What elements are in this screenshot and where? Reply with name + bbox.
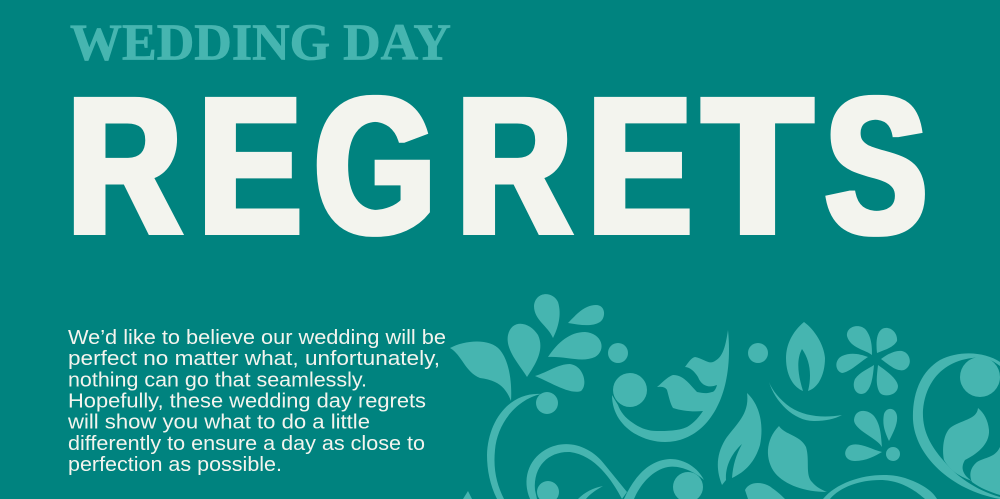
main title: regrets: E [199, 58, 301, 274]
six-petal flower [836, 326, 910, 395]
main title: regrets: G [315, 58, 435, 274]
middle leaves [718, 322, 937, 499]
intro paragraph: nothing can go that seamlessly. [68, 370, 367, 392]
right swirl [913, 353, 1000, 499]
main title: regrets: R [457, 58, 571, 274]
main title: regrets [68, 58, 926, 274]
main title: regrets: E [588, 58, 691, 274]
small flower [845, 409, 900, 461]
left sprig of leaves [450, 294, 604, 499]
intro paragraph: Hopefully, these wedding day regrets [68, 390, 426, 412]
main title: regrets: R [68, 58, 181, 274]
main title: regrets: S [826, 58, 926, 274]
intro paragraph [67, 327, 446, 476]
floral decoration [450, 294, 1000, 499]
intro paragraph: will show you what to do a little [67, 412, 370, 434]
lower curling vines [526, 444, 704, 499]
bird-like swirl [608, 330, 729, 442]
intro paragraph: perfection as possible. [68, 454, 282, 476]
intro paragraph: differently to ensure a day as close to [68, 433, 425, 455]
intro paragraph: We’d like to believe our wedding will be [68, 327, 446, 349]
intro paragraph: perfect no matter what, unfortunately, [68, 348, 440, 370]
kicker heading: wedding day: WEDDING DAY [70, 14, 451, 72]
main title: regrets: T [703, 58, 812, 274]
